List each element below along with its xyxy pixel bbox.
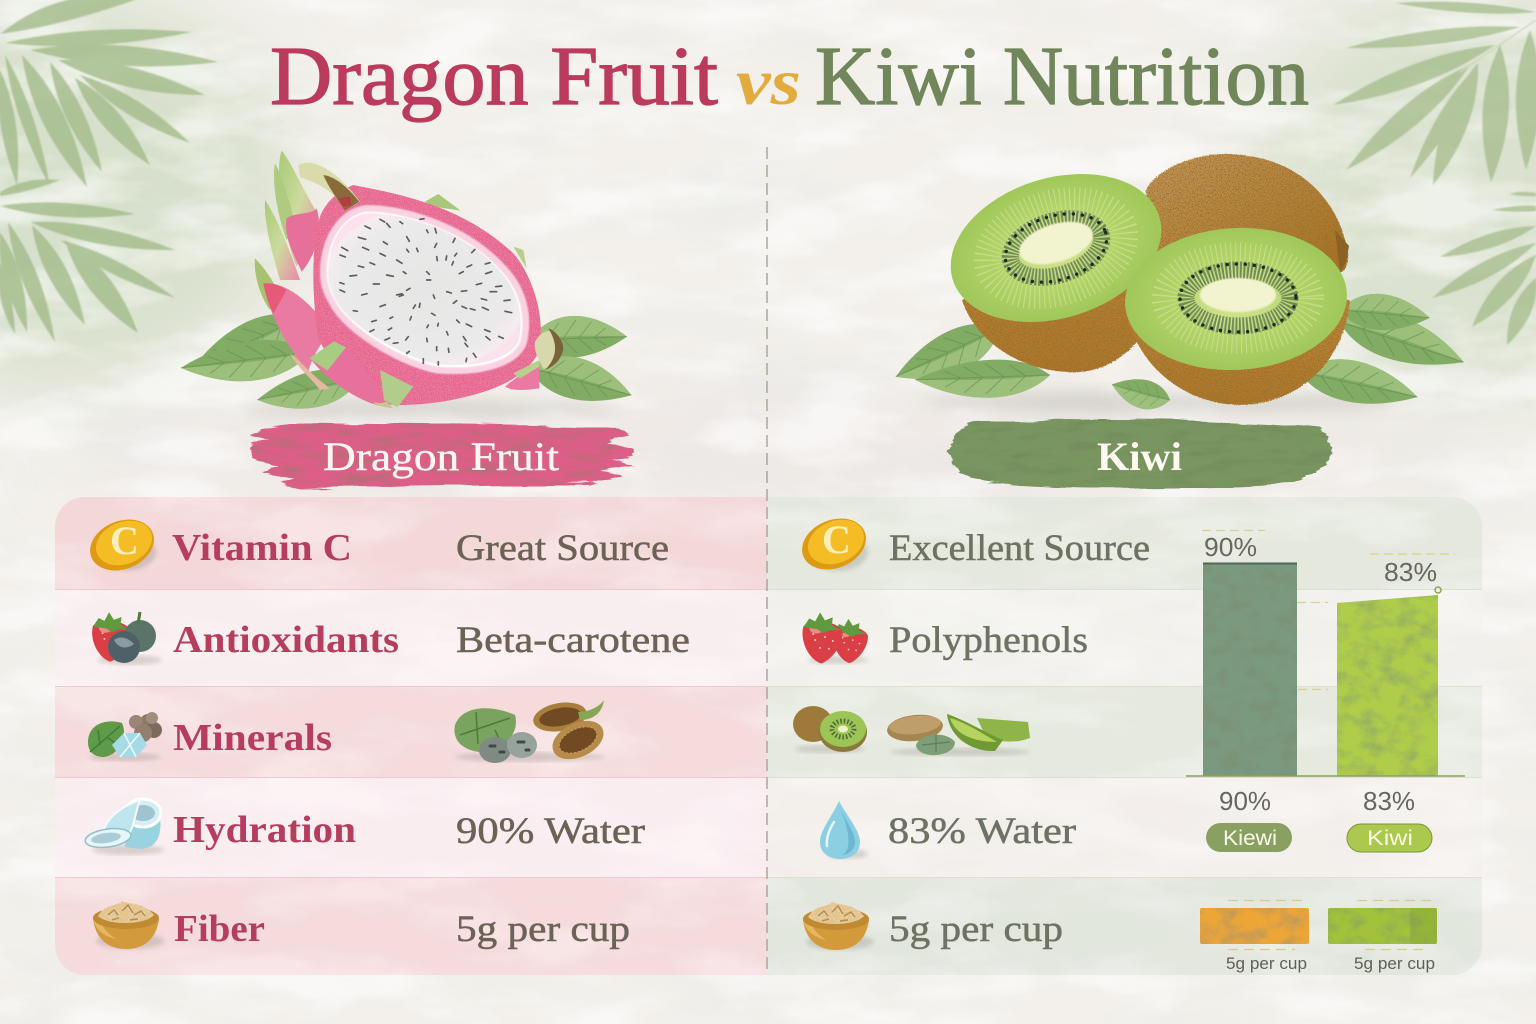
pill: Kiewi	[1206, 823, 1292, 852]
caption left: 5g per cup	[1226, 954, 1307, 973]
title: vs	[736, 46, 801, 119]
kiwi: right halved fruit	[1121, 222, 1351, 405]
image: dragon fruit mineral sources	[454, 699, 610, 767]
panel: comparison table	[55, 497, 1482, 975]
panel: kiwi rows	[767, 497, 1482, 975]
axis value 83%: 83%	[1363, 786, 1415, 816]
pill: Kiwi	[1347, 824, 1432, 852]
brush label: Dragon Fruit	[250, 423, 634, 488]
kiwi: whole back fruit	[1146, 154, 1349, 272]
label: Fiber: Fiber	[174, 908, 265, 950]
icon: strawberry and blueberries	[92, 612, 162, 665]
bar chart: fiber content	[1200, 900, 1437, 973]
value: 90% Water: 90% Water	[456, 811, 645, 852]
image: kiwi slice, leaf and pods	[886, 712, 1030, 756]
pill: Kiewi: Kiewi	[1223, 827, 1277, 850]
icon: vitamin C coin right	[794, 509, 874, 579]
title	[270, 30, 1309, 123]
value: Beta-carotene: Beta-carotene	[456, 620, 690, 661]
palm fronds: top right	[1333, 2, 1536, 345]
value: 5g per cup: 5g per cup	[456, 909, 630, 950]
label: Antioxidants: Antioxidants	[173, 619, 399, 661]
label: Vitamin C: Vitamin C	[172, 527, 352, 569]
brush label: Kiwi: Kiwi	[1097, 434, 1182, 479]
label: Minerals: Minerals	[173, 717, 332, 759]
value: Great Source: Great Source	[456, 528, 669, 569]
caption right: 5g per cup	[1354, 954, 1435, 973]
value: Excellent Source: Excellent Source	[889, 528, 1150, 569]
bar value 83%: 83%	[1384, 557, 1437, 587]
illustration: dragon fruit on leaves	[179, 151, 637, 419]
center dashed divider	[766, 147, 768, 975]
value: 5g per cup right: 5g per cup	[889, 909, 1063, 950]
label: Hydration: Hydration	[173, 809, 356, 851]
image: kiwi whole and slice	[793, 706, 867, 753]
brush label: Dragon Fruit: Dragon Fruit	[323, 434, 559, 479]
icon: water drop	[820, 801, 868, 859]
icon: hydration bowls	[84, 799, 164, 855]
icon: minerals leaf, gem and rock	[88, 712, 162, 761]
title: Kiwi Nutrition	[815, 30, 1309, 123]
kiwi: left halved fruit	[932, 149, 1180, 372]
pill: Kiwi: Kiwi	[1367, 827, 1413, 850]
value: Polyphenols: Polyphenols	[889, 620, 1088, 661]
icon: vitamin C coin right: C	[822, 517, 851, 562]
illustration: three kiwis on leaves	[888, 149, 1471, 416]
bar value 90%: 90%	[1204, 532, 1257, 562]
palm fronds: top left	[0, 0, 218, 342]
icon: vitamin C coin: C	[110, 518, 139, 563]
value: 83% Water: 83% Water	[888, 811, 1076, 852]
axis value 90%: 90%	[1219, 786, 1271, 816]
bar chart: water content	[1186, 530, 1465, 852]
icon: strawberries	[803, 613, 868, 664]
brush label: Kiwi	[950, 420, 1331, 488]
icon: fiber bowl left	[93, 901, 164, 949]
icon: vitamin C coin	[82, 510, 162, 580]
icon: fiber bowl right	[803, 902, 874, 950]
title: Dragon Fruit	[270, 30, 718, 123]
panel: dragon fruit rows	[55, 497, 767, 975]
